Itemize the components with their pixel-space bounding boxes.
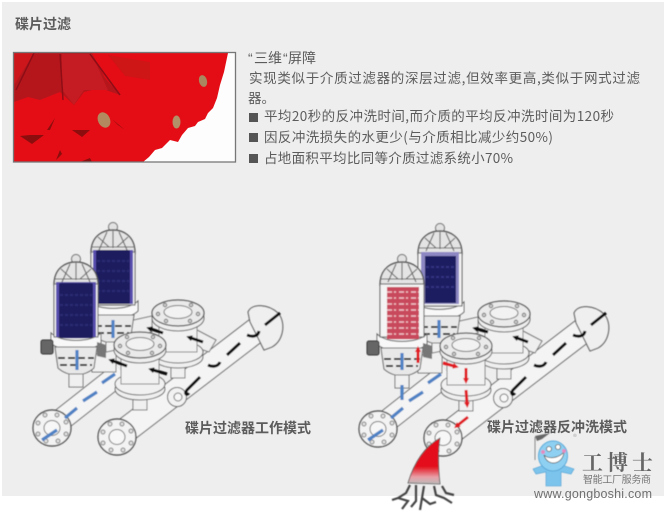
- blue flow arrows: [42, 320, 115, 440]
- title: 碟片过滤: [15, 14, 71, 34]
- photo: red disc filter close-up: [14, 52, 236, 162]
- red discharge plume with debris: [392, 438, 454, 510]
- blue flow arrows: [368, 320, 441, 440]
- logo: gongboshi watermark: [533, 432, 653, 501]
- black flow arrows: [113, 313, 280, 394]
- subheading: three-dimensional barrier: “: [248, 50, 253, 66]
- black flow arrows: [477, 313, 606, 394]
- logo tagline: 智能工厂服务商: [583, 471, 651, 486]
- red flow arrows: [418, 351, 468, 425]
- back filter with blue discs: [91, 222, 135, 305]
- front filter with blue discs: [54, 254, 98, 338]
- caption: backwash mode: 碟片过滤器反冲洗模式: [487, 417, 627, 437]
- registered mark: ®: [573, 432, 577, 443]
- bullet 2: 因反冲洗损失的水更少(与介质相比减少约50%): [264, 126, 553, 146]
- bullet 1: 平均20秒的反冲洗时间,而介质的平均反冲洗时间为120秒: [264, 105, 614, 125]
- subheading: three-dimensional barrier: 屏障: [288, 48, 316, 68]
- description text block: [248, 48, 640, 167]
- subheading: three-dimensional barrier: 三维: [254, 48, 282, 68]
- back filter with blue discs: [418, 224, 462, 306]
- description text block: 实现类似于介质过滤器的深层过滤,但效率更高,类似于网式过滤: [249, 67, 640, 87]
- subheading: three-dimensional barrier: [248, 48, 316, 68]
- subheading: three-dimensional barrier: “: [283, 50, 288, 66]
- icon: mascot: [533, 433, 574, 486]
- diagram: filter working mode: [33, 222, 283, 455]
- bullet 3: 占地面积平均比同等介质过滤系统小70%: [264, 147, 513, 167]
- logo url: www.gongboshi.com: [533, 487, 652, 501]
- description text block: 器。: [248, 87, 275, 107]
- front filter with red discs: [380, 254, 424, 339]
- diagram: backwash mode: [359, 224, 609, 510]
- caption: working mode: 碟片过滤器工作模式: [185, 418, 311, 438]
- logo wordmark: 工博士: [582, 447, 653, 477]
